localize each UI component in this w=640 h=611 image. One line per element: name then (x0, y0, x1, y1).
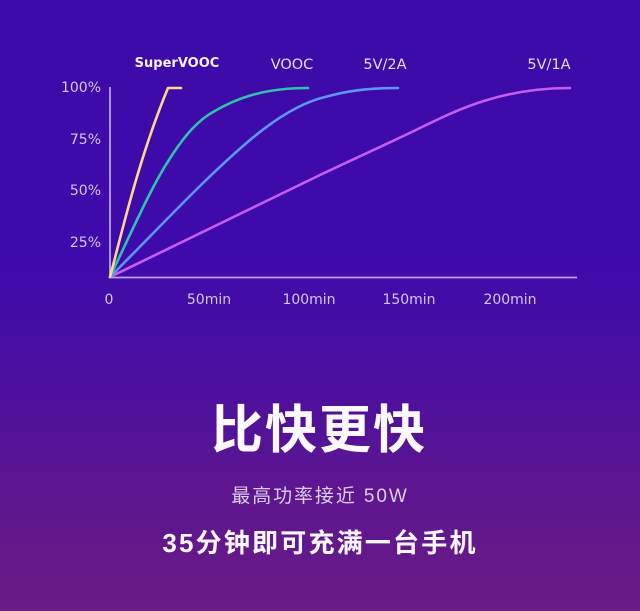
tagline: 35分钟即可充满一台手机 (162, 528, 478, 558)
x axis labels: 100min (282, 292, 336, 308)
axes (110, 87, 577, 278)
subheading: 最高功率接近 50W (231, 486, 409, 507)
x axis labels: 0 (105, 292, 113, 308)
curve: VOOC (110, 88, 308, 277)
y axis labels: 50% (70, 183, 101, 199)
curve: SuperVOOC (110, 88, 181, 277)
y axis labels: 100% (61, 80, 101, 96)
series labels: 5V/2A (363, 57, 407, 73)
series labels: SuperVOOC (135, 56, 219, 71)
series labels: 5V/1A (527, 57, 571, 73)
curve: 5V/2A (110, 88, 398, 277)
y axis labels: 25% (70, 235, 101, 251)
y axis labels: 75% (70, 132, 101, 148)
chart: charging speed curves (61, 56, 577, 308)
x axis labels: 50min (187, 292, 231, 308)
x axis labels: 200min (483, 292, 537, 308)
heading: 比快更快 (211, 402, 427, 460)
curve: 5V/1A (110, 88, 570, 277)
x axis labels (105, 292, 537, 308)
series labels: VOOC (271, 57, 313, 73)
y axis labels (61, 80, 101, 251)
series labels (135, 56, 571, 73)
x axis labels: 150min (382, 292, 436, 308)
